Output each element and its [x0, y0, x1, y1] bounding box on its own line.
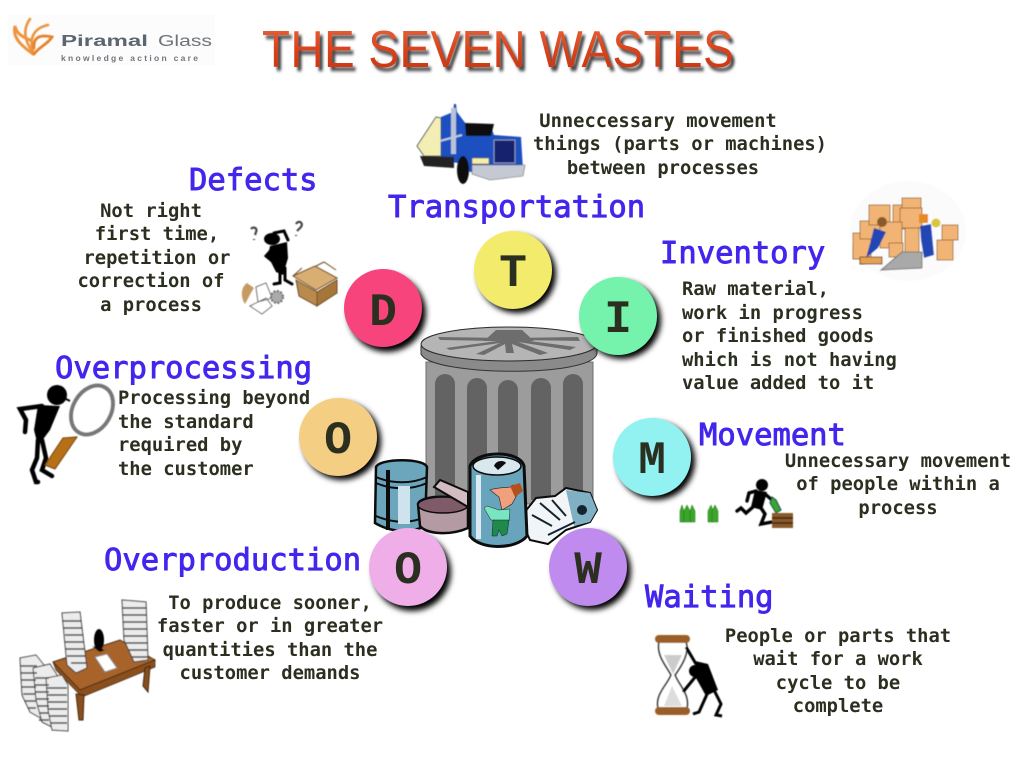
block: Inventory description: value added to it [682, 373, 874, 394]
block: Inventory description [682, 279, 897, 394]
block: Overprocessing description [118, 388, 310, 480]
icon: figure with hourglass [655, 635, 722, 716]
heading: Inventory: Inventory [660, 236, 825, 271]
logo tagline: knowledge action care [61, 53, 198, 63]
circle T: T [499, 248, 527, 300]
block: Overproduction description: faster or in greater [157, 616, 383, 637]
block: Transportation description: things (parts or machines) [533, 134, 827, 155]
circle D: D [369, 287, 397, 339]
heading: Overproduction: Overproduction [104, 543, 361, 578]
heading: Waiting: Waiting [645, 580, 774, 615]
icon: blue truck [417, 104, 525, 184]
heading: Movement: Movement [699, 418, 846, 453]
block: Overproduction description: quantities than the [163, 640, 377, 661]
circle O overprocessing [299, 398, 381, 480]
circle O overproduction: O [394, 545, 422, 597]
block: Transportation description: Unneccessary movement [539, 111, 777, 132]
opened tin [418, 497, 468, 533]
circle M [613, 418, 695, 500]
icon: workers and boxes [850, 181, 966, 281]
block: Defects description: first time, [95, 224, 219, 245]
block: Defects description: Not right [100, 201, 202, 222]
heading: Transportation: Transportation [388, 190, 645, 225]
circle W: W [574, 545, 602, 597]
block: Movement description: Unnecessary movement [785, 451, 1011, 472]
block: Defects description: repetition or [84, 248, 230, 269]
large can [470, 454, 527, 546]
logo: Piramal Glass: Glass [158, 33, 212, 50]
circle T [474, 231, 556, 313]
blue tin [375, 460, 427, 531]
can body [426, 362, 593, 504]
block: Inventory description: which is not having [682, 350, 897, 371]
man inside can [484, 483, 523, 536]
block: Inventory description: Raw material, [682, 279, 829, 300]
circle W [549, 528, 631, 610]
block: Overprocessing description: Processing beyond [118, 388, 310, 409]
block: Defects description [78, 201, 230, 316]
circle O overprocessing: O [324, 415, 352, 467]
circle I: I [604, 294, 632, 346]
block: Waiting description: complete [793, 696, 883, 717]
block: Movement description [785, 451, 1011, 519]
icon: figure with magnifying glass [20, 378, 121, 482]
block: Overproduction description: customer demands [180, 663, 360, 684]
block: Inventory description: or finished goods [682, 326, 874, 347]
block: Waiting description [725, 626, 951, 717]
block: Overprocessing description: the customer [118, 459, 254, 480]
circle O overproduction [369, 528, 451, 611]
title: THE SEVEN WASTES [265, 25, 737, 83]
pile of cans [375, 454, 597, 546]
can lid [421, 346, 597, 371]
block: Waiting description: cycle to be [776, 673, 900, 694]
title: THE SEVEN WASTES [262, 21, 734, 79]
icon: running figure with bottles [680, 479, 793, 528]
heading: Overprocessing: Overprocessing [55, 351, 312, 386]
block: Overprocessing description: required by [118, 435, 242, 456]
block: Overprocessing description: the standard [118, 412, 254, 433]
icon: orange flame [14, 19, 52, 54]
block: Overproduction description [157, 593, 383, 684]
icon: desk with paper stacks [20, 600, 155, 731]
circle I [579, 277, 661, 359]
block: Transportation description [533, 111, 827, 179]
logo: Piramal Glass [8, 15, 215, 65]
circle M: M [638, 435, 666, 487]
block: Overproduction description: To produce sooner, [168, 593, 372, 614]
block: Waiting description: wait for a work [753, 649, 923, 670]
heading: Defects: Defects [189, 163, 318, 198]
circle D [344, 269, 426, 352]
block: Movement description: process [858, 498, 938, 519]
block: Defects description: correction of [78, 271, 224, 292]
crumpled can [520, 488, 597, 544]
block: Waiting description: People or parts that [725, 626, 951, 647]
trash can [421, 327, 597, 504]
block: Transportation description: between processes [567, 158, 759, 179]
block: Inventory description: work in progress [682, 303, 863, 324]
block: Movement description: of people within a [796, 474, 1000, 495]
icon: puzzled figure with box [242, 222, 337, 314]
logo wordmark: Piramal [61, 33, 148, 50]
block: Defects description: a process [100, 295, 202, 316]
